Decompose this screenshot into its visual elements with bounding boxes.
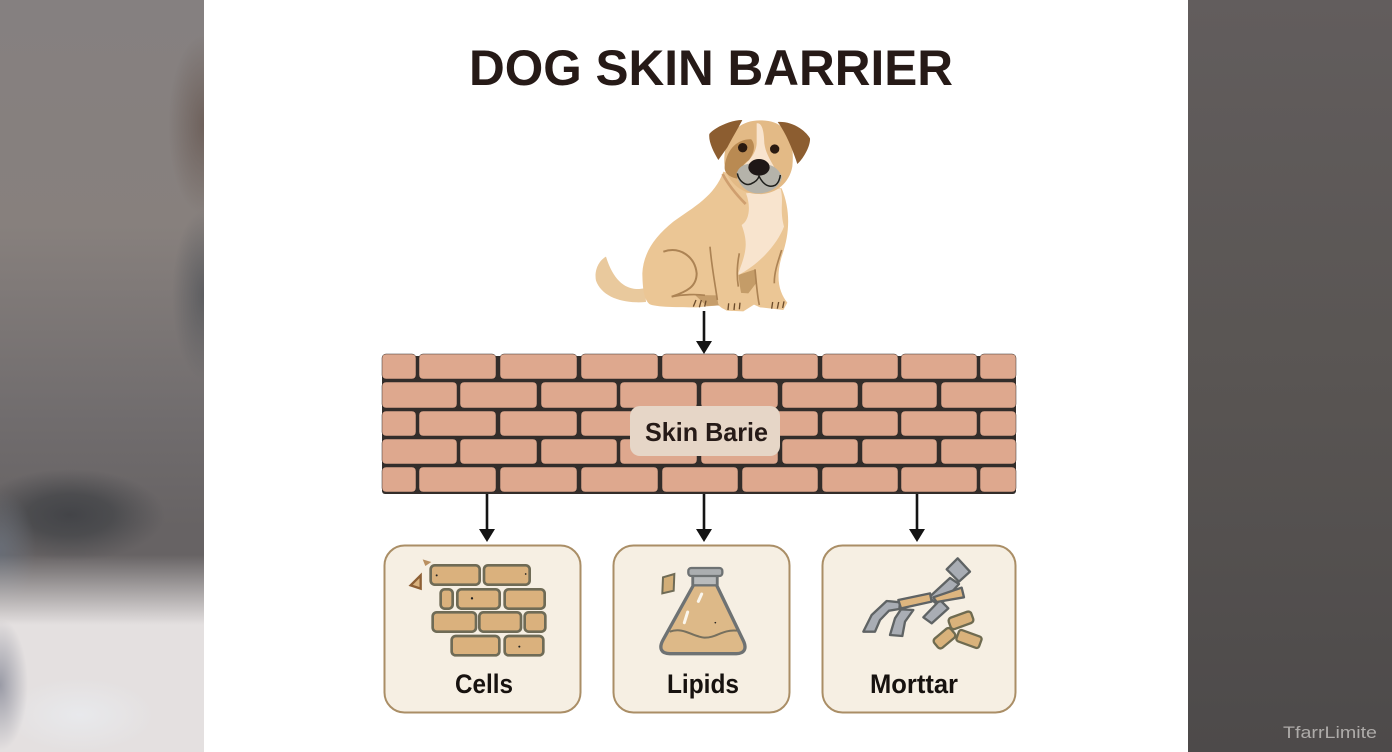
panel: mortar xyxy=(822,546,1016,712)
cells card xyxy=(384,546,580,712)
dog haunch shadow xyxy=(695,295,720,306)
wall label xyxy=(630,406,780,456)
dog head xyxy=(724,120,793,194)
panel: lipids xyxy=(614,546,790,712)
icon: sitting dog xyxy=(596,120,810,311)
dog collar xyxy=(723,174,746,204)
lipids label: Lipids xyxy=(667,669,739,699)
arrow: wall to cells xyxy=(479,494,495,542)
icon: cell bricks xyxy=(411,559,545,655)
dog right ear xyxy=(778,122,810,164)
dog toes xyxy=(693,300,784,310)
dog eye patch xyxy=(725,139,754,179)
panel: cells xyxy=(384,546,580,712)
dog shadow between legs xyxy=(737,269,756,293)
dog chest patch xyxy=(737,188,784,276)
dog right eye xyxy=(770,144,779,154)
panel: blurred left backdrop xyxy=(0,0,204,752)
dog left ear xyxy=(709,120,742,160)
dog tail xyxy=(596,257,646,302)
dog right leg outline xyxy=(755,250,782,305)
dog nose xyxy=(748,159,770,176)
brick wall xyxy=(382,354,1016,494)
title: DOG SKIN BARRIER xyxy=(469,40,953,96)
cells label: Cells xyxy=(455,669,513,699)
icon: mortar trowel pieces xyxy=(863,558,982,650)
dog mouth xyxy=(737,173,780,186)
dog left leg outline xyxy=(710,247,739,300)
panel: blurred right backdrop xyxy=(1188,0,1392,752)
mortar label: Morttar xyxy=(870,669,958,699)
arrow: wall to lipids xyxy=(696,494,712,542)
dog haunch line xyxy=(663,250,697,297)
dog left eye xyxy=(738,143,747,152)
arrow: dog to wall xyxy=(696,311,712,354)
wall mortar xyxy=(382,356,1016,494)
dog left front leg xyxy=(710,247,744,311)
dog muzzle xyxy=(737,164,782,193)
panel: white centre xyxy=(204,0,1188,752)
dog haunch foot line xyxy=(672,295,705,297)
dog face blaze xyxy=(742,123,774,167)
arrow: wall to mortar xyxy=(909,494,925,542)
icon: lipid flask xyxy=(661,568,745,654)
mortar card xyxy=(822,546,1016,712)
dog body xyxy=(642,172,788,311)
wall bricks xyxy=(382,354,1016,492)
wall label: Skin Barie xyxy=(645,417,768,447)
watermark: TfarrLimite xyxy=(1283,723,1377,742)
lipids card xyxy=(614,546,790,712)
